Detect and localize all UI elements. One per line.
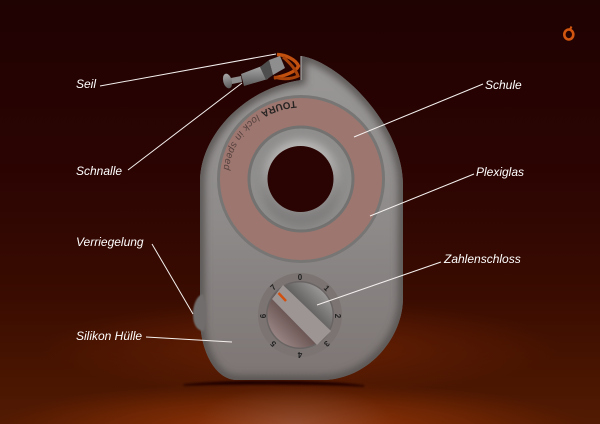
logo icon — [564, 26, 573, 40]
buckle shaft — [241, 66, 268, 86]
combination lock: 1 — [322, 284, 332, 293]
latch — [193, 294, 206, 331]
label: Zahlenschloss: Zahlenschloss — [443, 252, 521, 266]
buckle head — [221, 73, 234, 89]
combination lock: 7 — [269, 282, 278, 292]
label: Silikon Hülle: Silikon Hülle — [76, 329, 142, 343]
center hole — [268, 146, 334, 212]
rope — [274, 54, 298, 78]
device body — [200, 56, 403, 380]
notch edge — [300, 56, 302, 80]
label: Schnalle: Schnalle — [76, 164, 122, 178]
plexiglas ring — [218, 96, 384, 262]
floor shadow — [184, 381, 364, 386]
buckle neck — [231, 76, 242, 84]
combination lock — [258, 273, 342, 359]
combination lock: 5 — [268, 339, 278, 348]
buckle block — [260, 60, 273, 80]
combination lock: 3 — [322, 339, 331, 349]
device: buckle and rope — [221, 54, 298, 89]
knob bar — [272, 285, 331, 345]
orange marker — [278, 293, 286, 301]
spool hub — [249, 127, 353, 231]
label: Plexiglas: Plexiglas — [476, 165, 524, 179]
label: Verriegelung: Verriegelung — [76, 235, 144, 249]
background — [0, 179, 600, 424]
label lines — [100, 54, 483, 342]
combination lock: 4 — [297, 350, 302, 359]
label: Seil: Seil — [76, 77, 96, 91]
engraved text: TOURA lock in speed — [224, 101, 297, 171]
combination lock: 2 — [333, 314, 342, 319]
digits: 0 — [298, 273, 303, 282]
label: Schule: Schule — [485, 78, 522, 92]
combination lock: 6 — [259, 313, 268, 318]
